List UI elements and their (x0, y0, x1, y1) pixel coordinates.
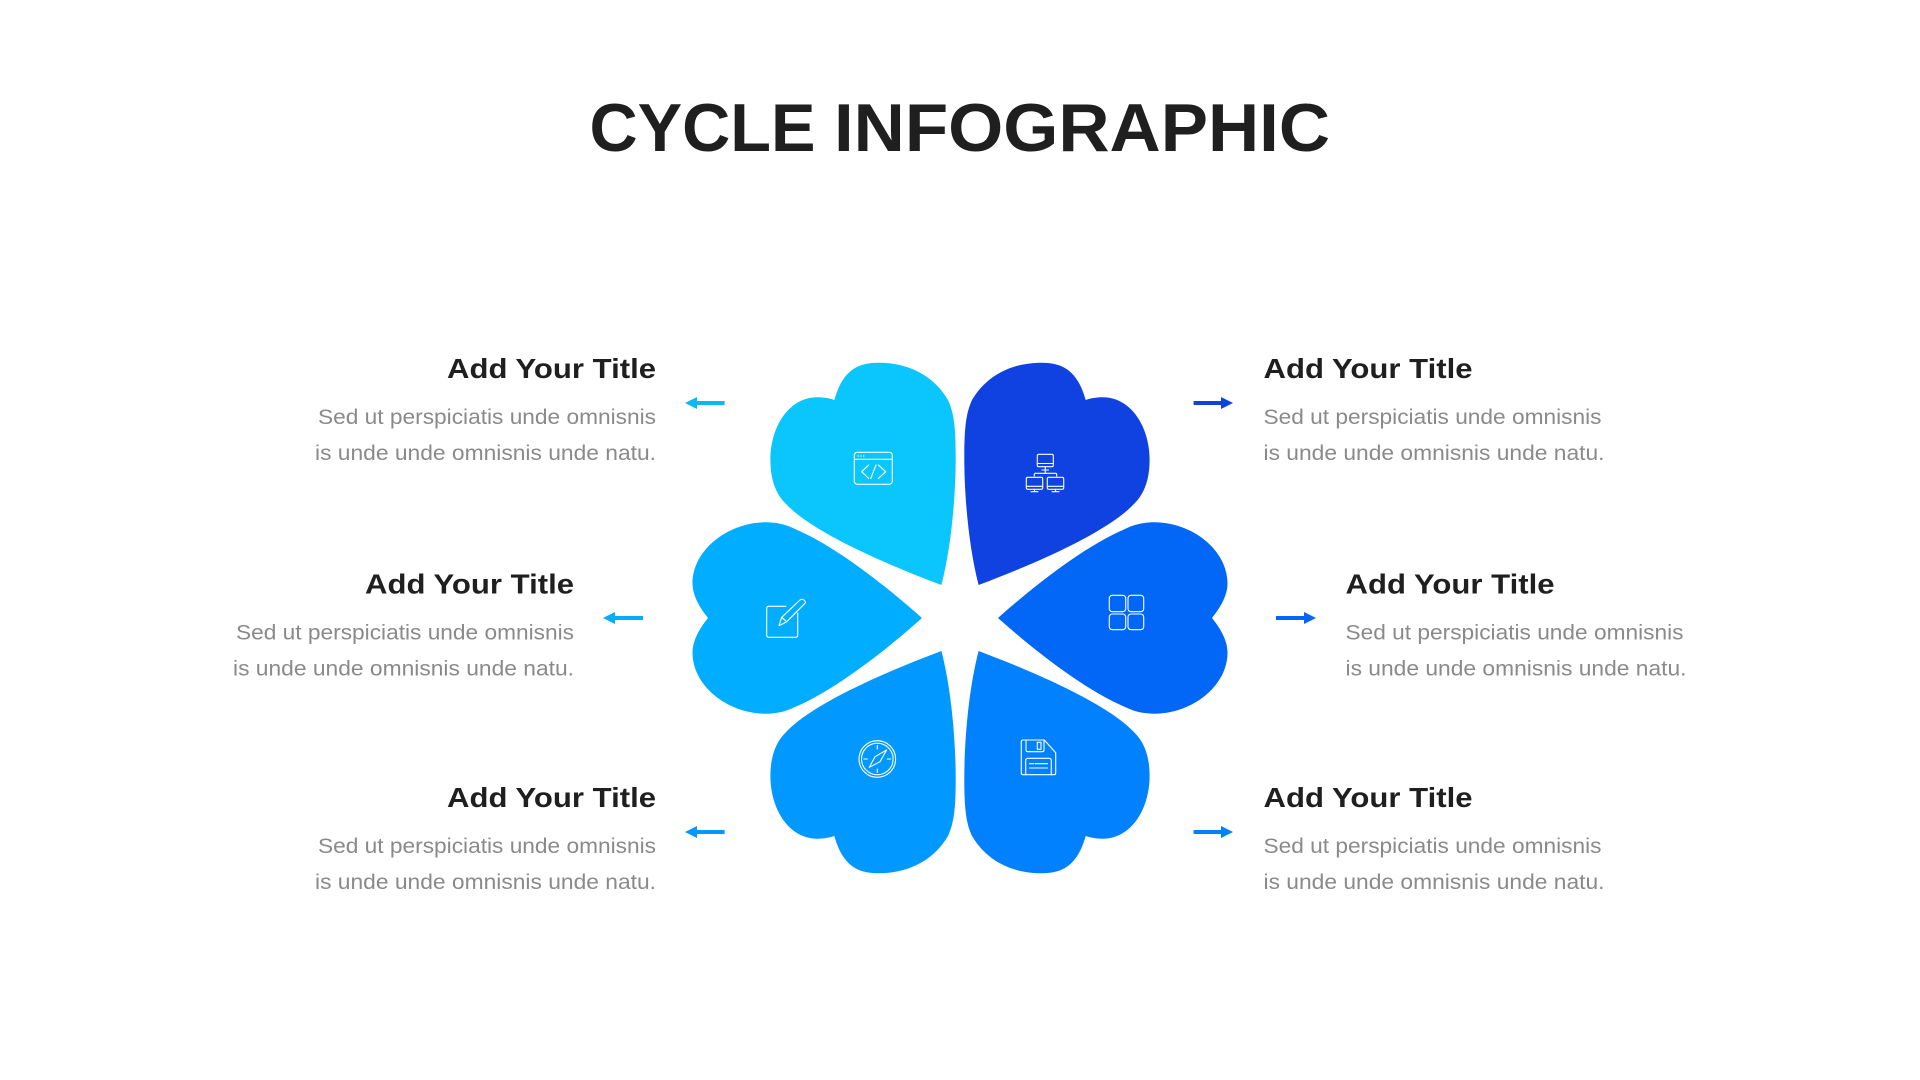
text block: top left: is unde unde omnisnis unde natu. (315, 442, 656, 465)
text block: top right: is unde unde omnisnis unde natu. (1264, 442, 1604, 465)
text block: bottom left: is unde unde omnisnis unde natu. (315, 871, 656, 894)
text block: top left (315, 353, 656, 465)
title (590, 90, 1330, 166)
text block: top left: Sed ut perspiciatis unde omnisnis (318, 406, 656, 429)
text block: middle left (233, 568, 574, 680)
petal: middle right (998, 522, 1228, 714)
arrow: top right (1194, 397, 1233, 409)
text block: bottom right (1264, 782, 1604, 894)
arrow: bottom right (1194, 826, 1233, 838)
icon: app grid (1109, 595, 1144, 630)
cycle diagram (692, 363, 1228, 873)
text block: middle right: Add Your Title (1346, 568, 1554, 600)
text block: middle left: Add Your Title (365, 568, 574, 600)
arrow: bottom left (685, 826, 725, 838)
text block: bottom right: is unde unde omnisnis unde natu. (1264, 871, 1604, 894)
icon: code window (854, 452, 892, 484)
text block: bottom left: Sed ut perspiciatis unde omnisnis (318, 835, 656, 858)
text block: bottom left: Add Your Title (447, 782, 656, 813)
text block: middle right (1346, 568, 1686, 680)
text block: middle right: Sed ut perspiciatis unde omnisnis (1346, 622, 1684, 644)
petal: bottom left (770, 651, 956, 873)
text block: bottom right: Sed ut perspiciatis unde omnisnis (1264, 835, 1602, 858)
text block: middle left: is unde unde omnisnis unde natu. (233, 658, 574, 680)
icon: network (1026, 454, 1064, 492)
icon: edit pencil (767, 599, 805, 637)
text block: bottom right: Add Your Title (1264, 782, 1472, 813)
arrow: middle left (603, 612, 643, 624)
text block: top right: Sed ut perspiciatis unde omnisnis (1264, 406, 1602, 429)
text block: top right: Add Your Title (1264, 353, 1472, 384)
icon: compass (859, 741, 896, 777)
arrow: top left (685, 397, 725, 409)
text block: top left: Add Your Title (447, 353, 656, 384)
petal: middle left (692, 522, 922, 714)
arrow: middle right (1276, 612, 1316, 624)
text block: top right (1264, 353, 1604, 465)
petal: top right (964, 363, 1150, 585)
icon: floppy disk (1021, 740, 1056, 775)
text block: middle left: Sed ut perspiciatis unde omnisnis (236, 622, 574, 644)
petal: top left (770, 363, 956, 585)
title: CYCLE (590, 90, 816, 166)
title: INFOGRAPHIC (834, 90, 1330, 166)
petal: bottom right (964, 651, 1150, 873)
text block: middle right: is unde unde omnisnis unde natu. (1346, 658, 1686, 680)
text block: bottom left (315, 782, 656, 894)
